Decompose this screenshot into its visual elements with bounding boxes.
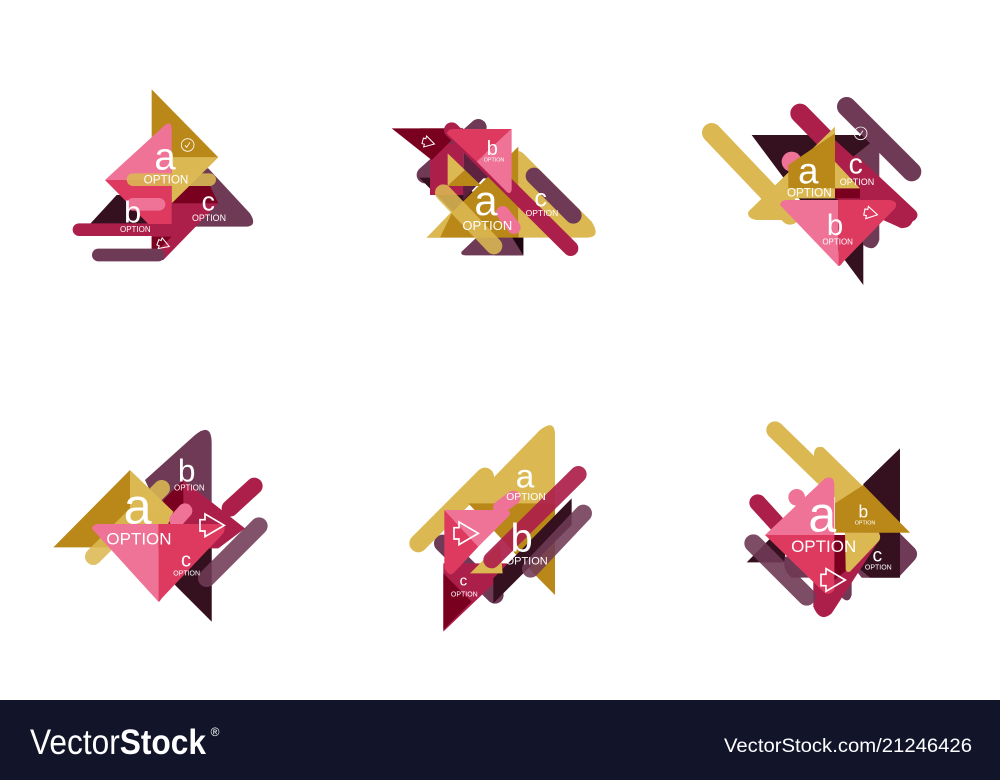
panel: option group 5 <box>418 425 583 632</box>
labels <box>106 453 205 577</box>
labels: OPTION <box>120 225 151 234</box>
icon: check <box>181 139 194 151</box>
labels: OPTION <box>192 213 226 223</box>
panel: option group 1 <box>79 89 253 260</box>
icon: arrow <box>421 135 436 149</box>
labels: OPTION <box>174 484 205 493</box>
labels: OPTION <box>484 158 504 164</box>
labels: OPTION <box>791 537 856 556</box>
logo: ® <box>211 725 220 739</box>
labels: b <box>827 209 843 242</box>
icon: arrow <box>821 569 845 591</box>
labels: OPTION <box>451 592 478 599</box>
labels: a <box>516 458 535 495</box>
icon: arrow <box>454 522 478 545</box>
logo: VectorStock <box>30 723 206 762</box>
labels: OPTION <box>506 492 546 503</box>
layered shapes <box>53 430 259 622</box>
footer bar <box>0 700 1000 780</box>
labels: OPTION <box>840 177 874 187</box>
labels <box>451 458 548 599</box>
labels <box>120 135 226 234</box>
layered shapes <box>392 127 596 255</box>
layered shapes <box>747 430 917 617</box>
labels: a <box>808 487 836 543</box>
labels: b <box>511 517 533 561</box>
labels: b <box>178 453 195 489</box>
labels: OPTION <box>855 521 875 527</box>
labels: OPTION <box>173 570 200 577</box>
labels: a <box>798 150 819 191</box>
panel: option group 6 <box>747 430 917 617</box>
labels <box>462 138 558 233</box>
labels: c <box>849 148 863 180</box>
icon: check <box>854 127 867 140</box>
panel: option group 4 <box>53 430 259 622</box>
panel: option group 3 <box>712 107 917 285</box>
labels <box>791 487 892 572</box>
labels: c <box>872 546 882 567</box>
labels: a <box>474 177 498 224</box>
labels: OPTION <box>787 187 832 200</box>
labels: c <box>460 573 468 590</box>
labels: OPTION <box>144 173 188 186</box>
labels: OPTION <box>526 208 558 218</box>
icon: arrow <box>200 514 224 537</box>
layered shapes <box>79 89 253 260</box>
labels: b <box>859 501 868 521</box>
icon: arrow <box>863 206 879 221</box>
labels <box>787 148 874 246</box>
labels: OPTION <box>106 529 172 548</box>
labels: c <box>181 550 191 572</box>
icon: arrow <box>156 237 171 252</box>
labels: c <box>534 185 547 213</box>
panel: option group 2 <box>392 127 596 255</box>
labels: b <box>487 138 498 160</box>
labels: OPTION <box>506 556 548 568</box>
labels: a <box>154 135 176 178</box>
labels: a <box>124 478 152 534</box>
labels: c <box>202 187 215 217</box>
labels: b <box>124 195 141 230</box>
labels: OPTION <box>822 237 853 246</box>
layered shapes <box>418 425 583 632</box>
labels: OPTION <box>865 565 892 572</box>
image id: VectorStock.com/21246426 <box>724 735 972 757</box>
labels: OPTION <box>462 218 512 233</box>
layered shapes <box>712 107 917 285</box>
